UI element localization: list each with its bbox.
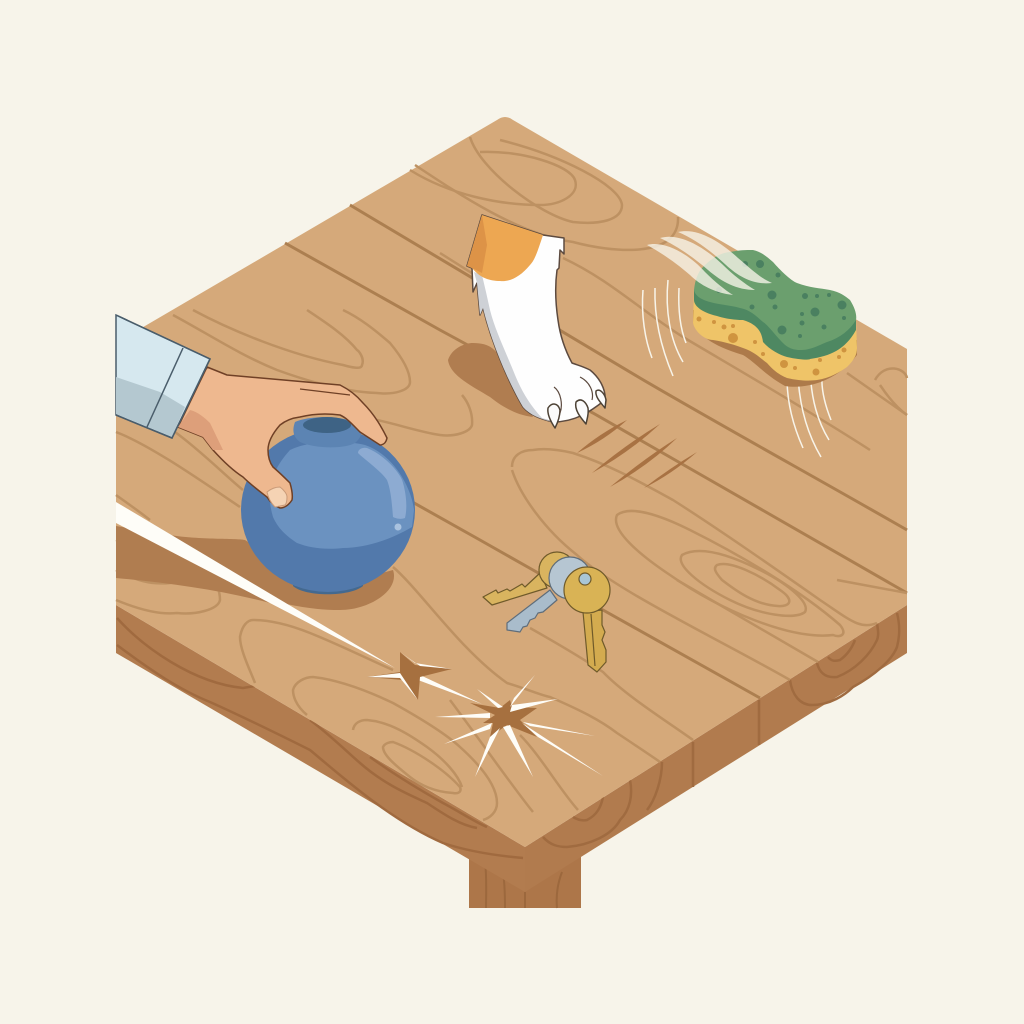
claws bbox=[548, 390, 606, 428]
thumbnail bbox=[267, 487, 287, 507]
crack star large bbox=[435, 675, 603, 777]
cat leg bbox=[467, 215, 606, 428]
vase neck bbox=[293, 417, 361, 447]
key: gold bbox=[564, 567, 610, 672]
table leg bbox=[469, 850, 581, 908]
vase bbox=[241, 417, 415, 594]
paw shadow bbox=[448, 343, 533, 417]
wood grain bbox=[116, 137, 907, 820]
hand bbox=[178, 367, 387, 508]
table front left edge bbox=[116, 605, 525, 892]
key: brass bbox=[483, 552, 575, 605]
long crack bbox=[116, 502, 482, 704]
keys bbox=[483, 552, 610, 672]
motion lines around sponge bbox=[642, 280, 831, 457]
table top surface bbox=[116, 117, 907, 847]
vase body bbox=[241, 428, 415, 592]
sleeve bbox=[116, 315, 210, 438]
sponge bbox=[693, 250, 857, 387]
sponge swipes bbox=[647, 231, 772, 295]
table front right edge bbox=[525, 605, 907, 892]
cat paw scratches bbox=[577, 420, 697, 488]
plank lines bbox=[285, 205, 907, 698]
vase foot bbox=[293, 578, 363, 594]
vase highlight bbox=[358, 448, 406, 519]
key: silver bbox=[507, 557, 591, 632]
vase shadow bbox=[116, 526, 394, 610]
crack star small bbox=[367, 652, 452, 700]
